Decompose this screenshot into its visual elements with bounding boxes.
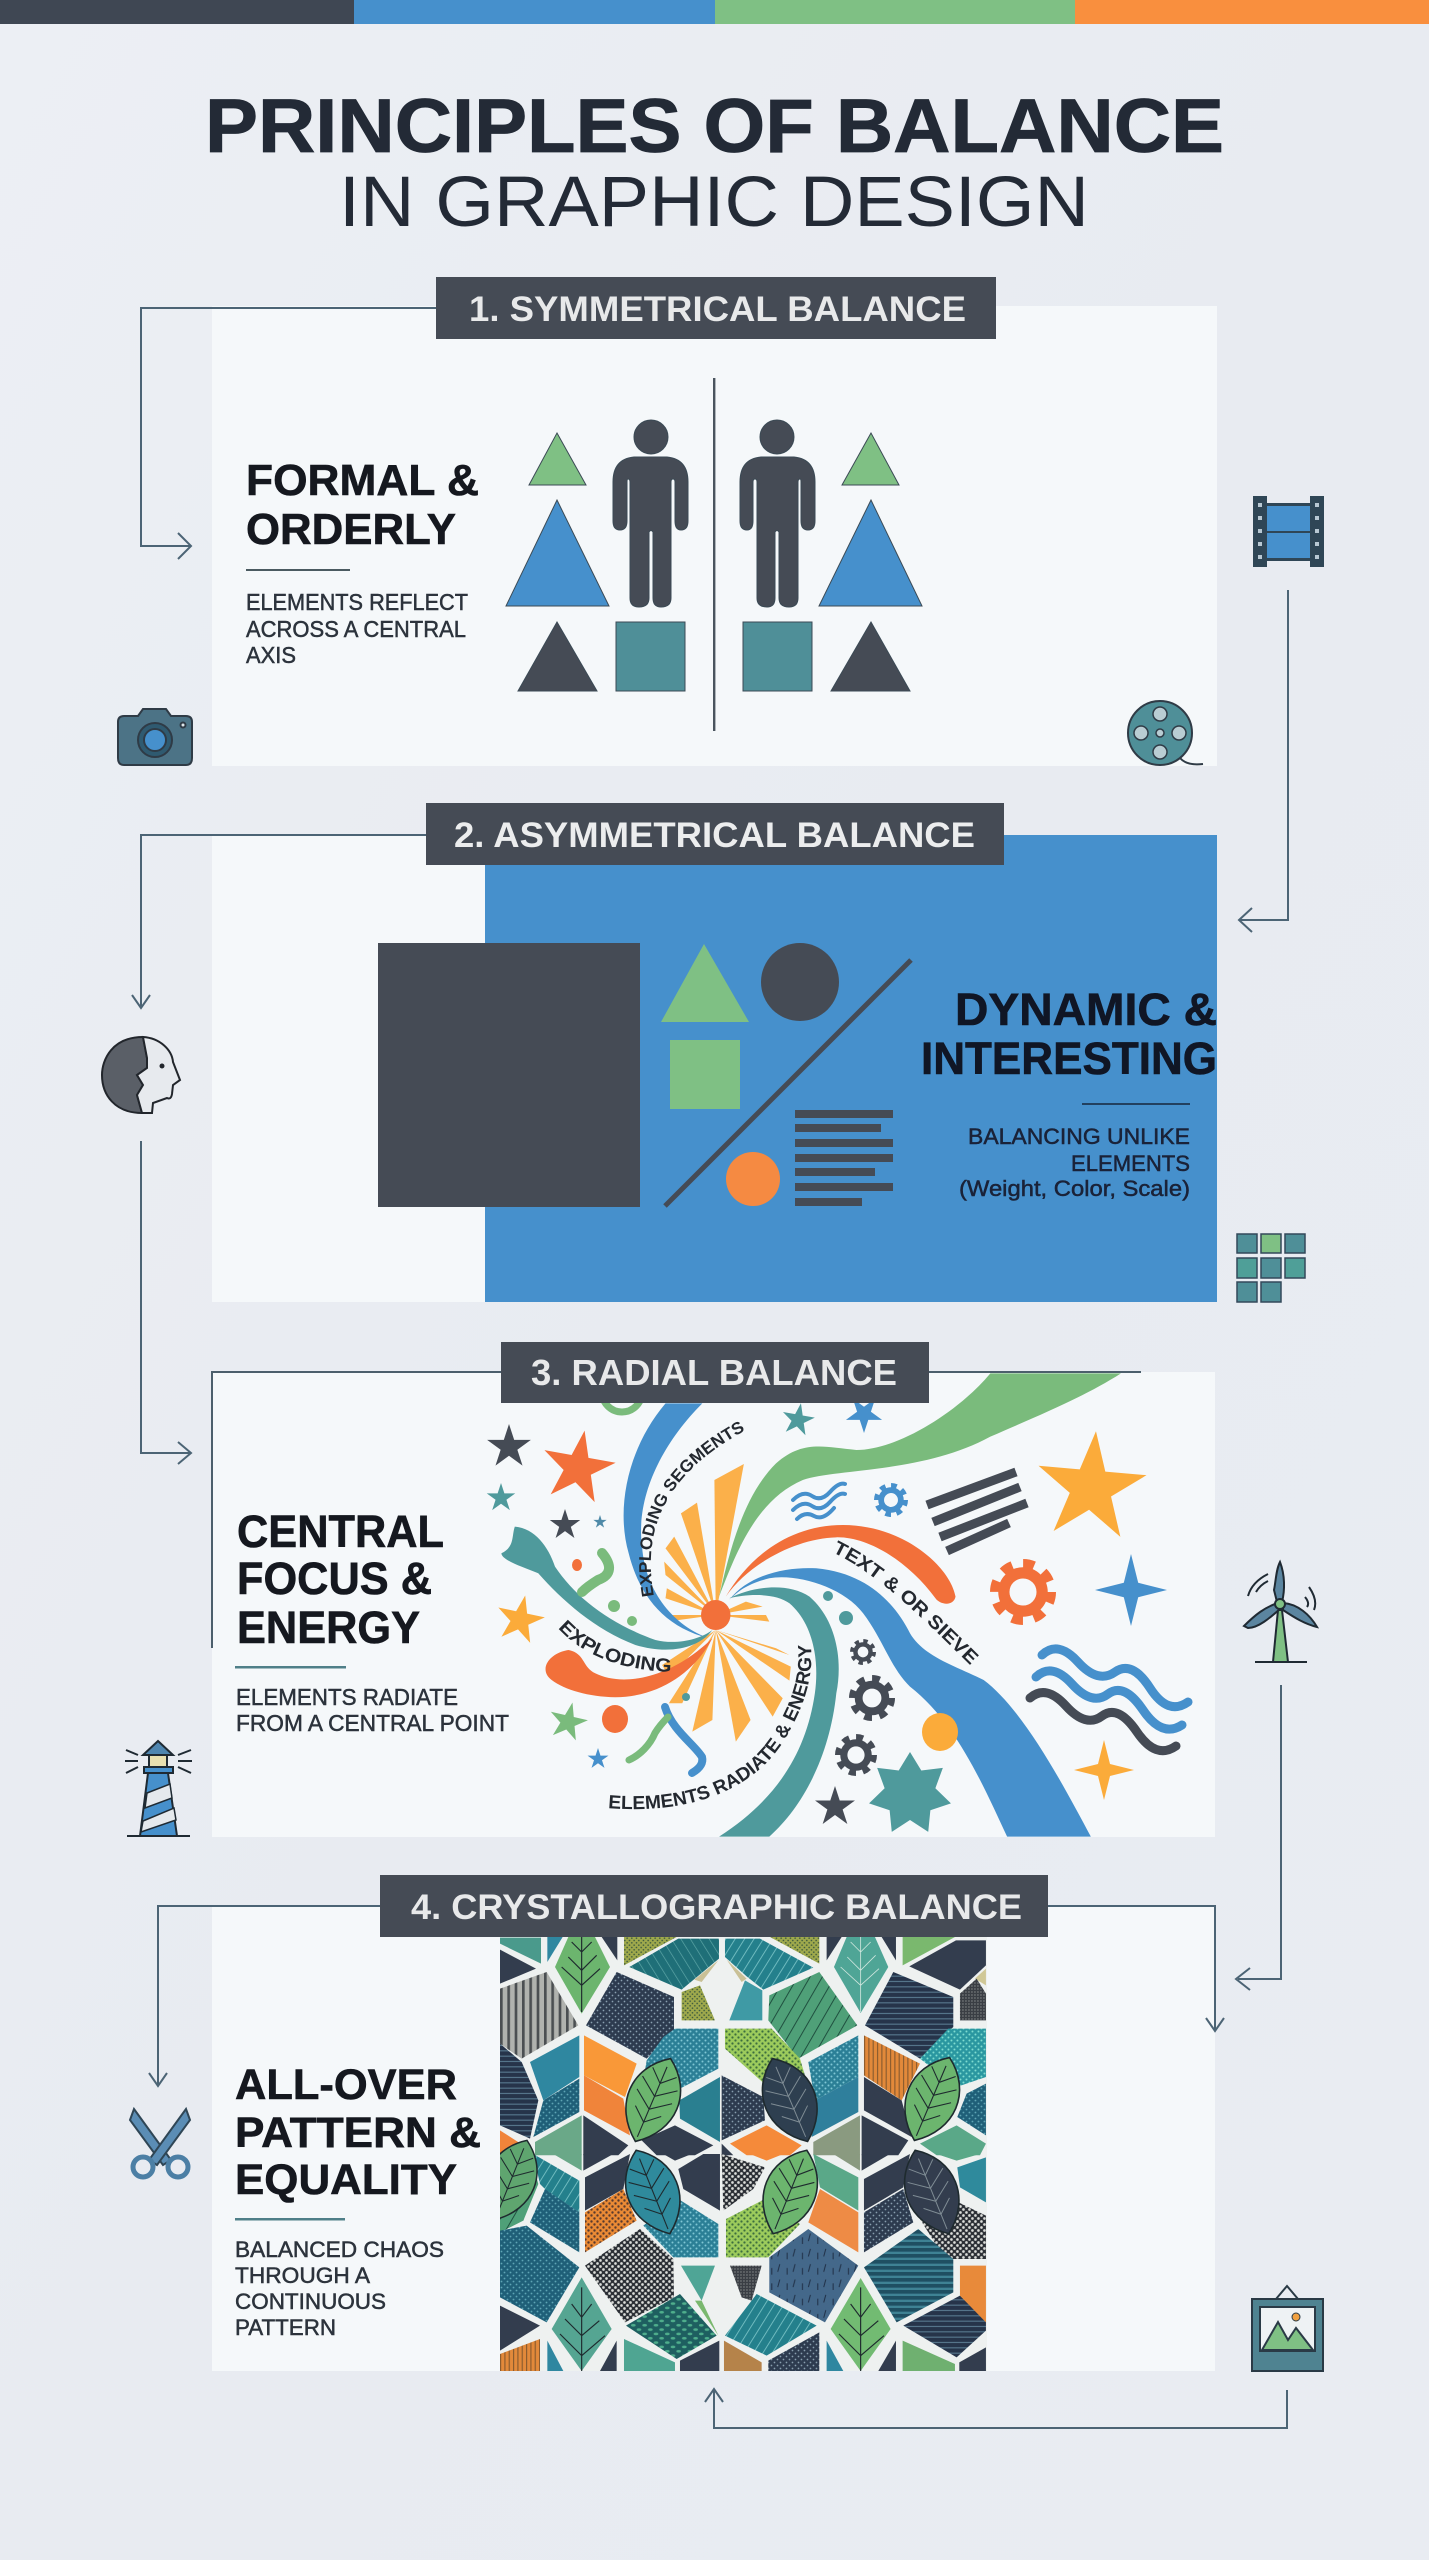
curved label text — [558, 1422, 979, 1810]
description: elements reflect: ACROSS A CENTRAL — [246, 616, 466, 642]
arrow: section 4 left — [149, 1906, 380, 2086]
heading text: all-over pattern and equality — [235, 2061, 481, 2204]
heading text: all-over pattern and equality: PATTERN & — [235, 2109, 481, 2157]
heading text: formal and orderly — [246, 456, 479, 554]
arrow: section 3 to section 4 — [1236, 1685, 1281, 1990]
swirl band: big blue — [729, 1568, 1091, 1837]
lower tiles — [500, 2154, 986, 2371]
icon: face profile — [102, 1037, 180, 1113]
description: balanced chaos: CONTINUOUS — [235, 2289, 386, 2314]
heading text: central focus and energy: CENTRAL — [237, 1506, 444, 1557]
icon: film strip — [1253, 496, 1324, 567]
badge: 1 symmetrical balance: 1. SYMMETRICAL BALANCE — [469, 290, 966, 329]
sun centre — [701, 1600, 730, 1630]
mirrored shapes left — [506, 420, 688, 691]
sunburst rays — [662, 1464, 791, 1742]
arrow: section 1 to section 2 — [1239, 590, 1288, 932]
description: balanced chaos: BALANCED CHAOS — [235, 2237, 444, 2262]
swirl band: orange arc — [726, 1525, 956, 1604]
description: balancing unlike elements: BALANCING UNLIKE — [968, 1124, 1190, 1149]
arrow: section 2 to section 3 — [141, 1141, 191, 1464]
description: balanced chaos: PATTERN — [235, 2315, 336, 2340]
diagonal line — [665, 960, 911, 1206]
badge: 3 radial balance — [501, 1342, 929, 1403]
heading text: all-over pattern and equality: EQUALITY — [235, 2156, 457, 2204]
icon: lighthouse — [125, 1741, 192, 1836]
green triangle — [661, 944, 749, 1022]
title: PRINCIPLES OF BALANCE — [205, 84, 1224, 169]
swirl band: green — [719, 1373, 1121, 1597]
curved label text: TEXT & OR SIEVE — [836, 1540, 979, 1665]
heading text: dynamic and interesting — [921, 984, 1217, 1084]
description: balancing unlike elements: ELEMENTS — [1071, 1151, 1190, 1176]
connector: section 3 frame — [212, 1372, 1141, 1648]
heading text: all-over pattern and equality: ALL-OVER — [235, 2061, 457, 2109]
panel: crystallographic balance — [212, 1906, 1215, 2371]
swirl band: teal left — [501, 1527, 712, 1650]
green square — [670, 1040, 740, 1109]
all-over tile pattern — [473, 1937, 987, 2371]
description: balanced chaos — [235, 2237, 444, 2340]
icon: film reel — [1128, 701, 1203, 765]
dark circle — [761, 943, 839, 1021]
icon: camera — [118, 709, 192, 765]
badge: 2 asymmetrical balance: 2. ASYMMETRICAL BALANCE — [454, 816, 975, 855]
arrow: section 1 entry — [141, 308, 436, 559]
panel: asymmetrical balance — [212, 835, 1217, 1302]
title: IN GRAPHIC DESIGN — [339, 163, 1089, 242]
curved label text: EXPLODING — [558, 1620, 670, 1672]
panel: radial balance — [212, 1372, 1215, 1837]
badge: 1 symmetrical balance — [436, 277, 996, 339]
orange circle — [726, 1152, 780, 1206]
radial burst artwork — [501, 1373, 1121, 1837]
heading text: central focus and energy: FOCUS & — [237, 1553, 432, 1604]
heading text: central focus and energy: ENERGY — [237, 1602, 420, 1653]
arrow: section 4 right — [1048, 1906, 1224, 2031]
gears — [838, 1485, 1051, 1773]
description: elements reflect — [246, 589, 468, 668]
title — [205, 84, 1224, 242]
description: balanced chaos: THROUGH A — [235, 2263, 370, 2288]
description: elements radiate — [236, 1684, 509, 1736]
curved label text: EXPLODING SEGMENTS — [639, 1422, 744, 1597]
badge: 4 crystallographic balance — [380, 1875, 1048, 1937]
icon: framed picture — [1252, 2286, 1323, 2371]
description: balancing unlike elements: (Weight, Color, Scale) — [959, 1176, 1190, 1201]
wave lines — [793, 1484, 1188, 1751]
description: elements reflect: AXIS — [246, 642, 296, 668]
swirl band: orange left — [546, 1638, 712, 1697]
description: elements reflect: ELEMENTS REFLECT — [246, 589, 468, 615]
leaves — [500, 2056, 960, 2235]
arrow: loop back — [705, 2389, 1287, 2428]
heading text: formal and orderly: ORDERLY — [246, 505, 456, 554]
icon: grid tiles — [1237, 1234, 1305, 1302]
icon: wind turbine — [1244, 1562, 1317, 1662]
heading text: central focus and energy — [237, 1506, 444, 1653]
swirl band: blue top — [624, 1403, 709, 1638]
description: elements radiate: FROM A CENTRAL POINT — [236, 1710, 509, 1736]
text bars — [795, 1110, 893, 1206]
diagonal stripes — [927, 1472, 1027, 1551]
curved label text: ELEMENTS RADIATE & ENERGY — [609, 1645, 812, 1810]
upper tiles — [500, 1937, 986, 2155]
description: elements radiate: ELEMENTS RADIATE — [236, 1684, 458, 1710]
heading text: formal and orderly: FORMAL & — [246, 456, 479, 505]
heading text: dynamic and interesting: INTERESTING — [921, 1033, 1217, 1084]
swirl band: teal right — [719, 1587, 839, 1837]
description: balancing unlike elements — [959, 1124, 1190, 1201]
arrow: section 2 left — [132, 835, 426, 1008]
heavy dark block — [378, 943, 640, 1207]
mirrored shapes right — [740, 420, 922, 691]
icon: scissors — [130, 2109, 190, 2177]
top colour bar — [0, 0, 1429, 24]
heading text: dynamic and interesting: DYNAMIC & — [955, 984, 1217, 1035]
badge: 3 radial balance: 3. RADIAL BALANCE — [531, 1352, 897, 1393]
central axis — [713, 378, 715, 731]
panel: symmetrical balance — [212, 306, 1217, 766]
scattered stars — [487, 1399, 1167, 1832]
badge: 4 crystallographic balance: 4. CRYSTALLOGRAPHIC BALANCE — [411, 1888, 1022, 1927]
badge: 2 asymmetrical balance — [426, 803, 1004, 865]
dots and squiggles — [572, 1372, 958, 1773]
